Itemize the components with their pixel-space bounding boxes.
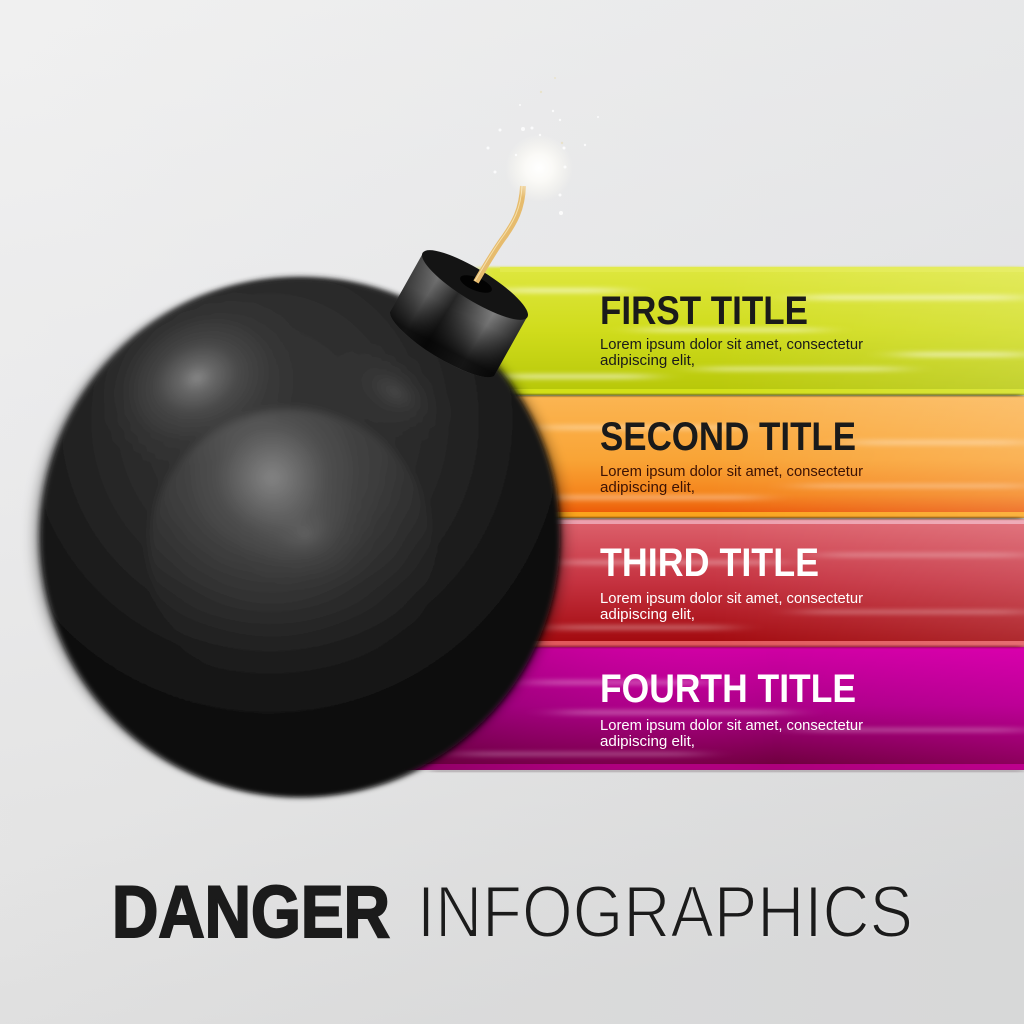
motion blur edge [42, 279, 558, 795]
heading: first title: FIRST TITLE [600, 289, 808, 333]
body: first: adipiscing elit, [600, 353, 695, 369]
text block: fourth [600, 667, 863, 750]
panel: third band [500, 517, 1024, 647]
body: third [600, 591, 863, 623]
body: fourth [600, 718, 863, 750]
spark [486, 77, 599, 215]
body: fourth: Lorem ipsum dolor sit amet, consectetur [600, 718, 863, 734]
fuse hole [458, 272, 494, 296]
bomb cap [390, 240, 536, 377]
title [112, 872, 913, 953]
heading: fourth title: FOURTH TITLE [600, 667, 856, 711]
body: first: Lorem ipsum dolor sit amet, consectetur [600, 337, 863, 353]
heading: third title: THIRD TITLE [600, 541, 819, 585]
body: third: adipiscing elit, [600, 607, 695, 623]
text block: first [600, 289, 863, 369]
fuse [475, 186, 523, 282]
body: second [600, 464, 863, 496]
body: second: Lorem ipsum dolor sit amet, consectetur [600, 464, 863, 480]
title: DANGER [112, 872, 390, 953]
panel: first band [480, 267, 1024, 395]
panel: fourth band [405, 646, 1024, 772]
text block: third [600, 541, 863, 623]
heading: second title: SECOND TITLE [600, 415, 856, 459]
title: INFOGRAPHICS [417, 872, 913, 953]
bomb [40, 240, 560, 797]
panel: second band [500, 394, 1024, 518]
body: second: adipiscing elit, [600, 480, 695, 496]
body: third: Lorem ipsum dolor sit amet, consectetur [600, 591, 863, 607]
text block: second [600, 415, 863, 496]
body: fourth: adipiscing elit, [600, 734, 695, 750]
sphere body [40, 254, 560, 797]
body: first [600, 337, 863, 369]
